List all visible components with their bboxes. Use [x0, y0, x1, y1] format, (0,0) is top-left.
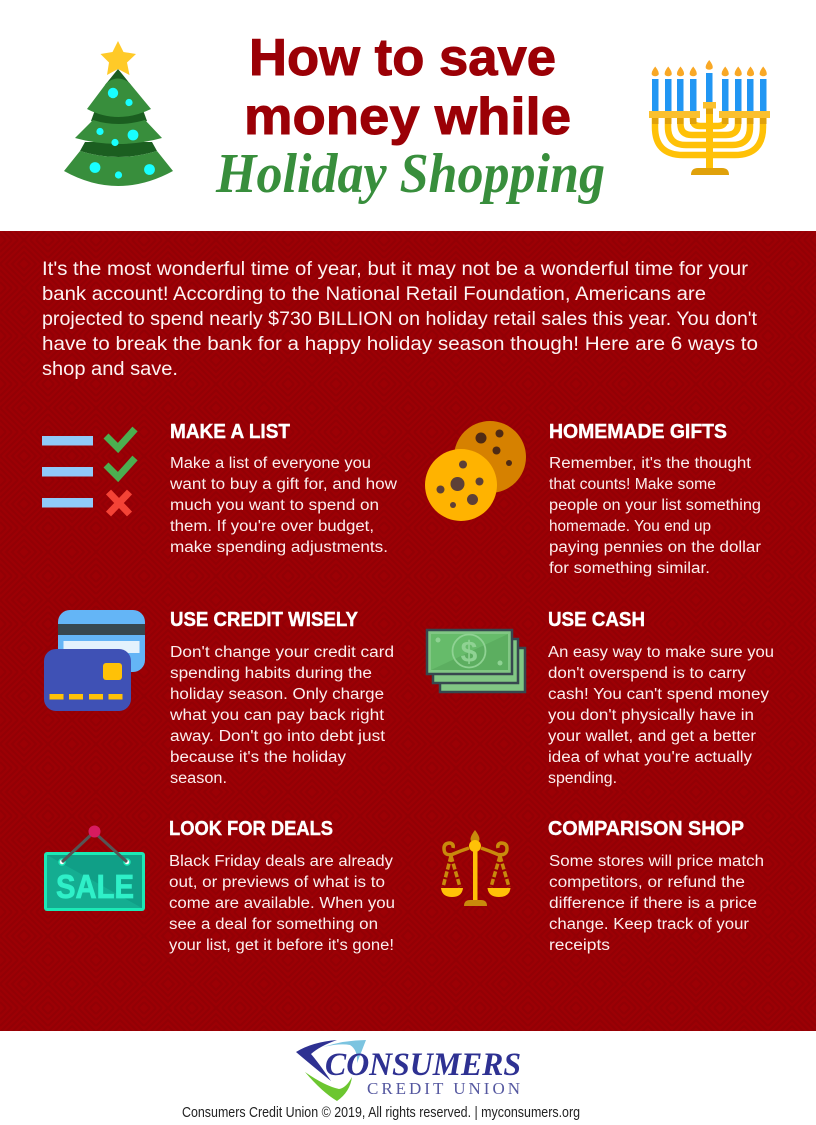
- icon: credit cards: [44, 610, 145, 711]
- section: make a list: make spending adjustments.: [170, 539, 388, 556]
- section: comparison shop: COMPARISON SHOP: [548, 817, 744, 840]
- section: make a list: want to buy a gift for, and how: [169, 476, 398, 493]
- section: use credit wisely: USE CREDIT WISELY: [170, 608, 358, 631]
- section: homemade gifts: HOMEMADE GIFTS: [549, 420, 727, 443]
- section: comparison shop: Some stores will price match: [549, 853, 764, 870]
- section: comparison shop: receipts: [549, 937, 610, 954]
- logo: Consumers Credit Union: CREDIT UNION: [367, 1079, 520, 1098]
- logo: Consumers Credit Union: [296, 1040, 521, 1101]
- title: Holiday Shopping: [215, 143, 605, 205]
- intro paragraph: have to break the bank for a happy holiday season though! Here are 6 ways to: [42, 334, 758, 355]
- section: look for deals: see a deal for something on: [169, 916, 378, 933]
- title: money while: [244, 88, 571, 146]
- section: make a list: Make a list of everyone you: [170, 455, 371, 472]
- section: look for deals: your list, get it before it's gone!: [169, 937, 394, 954]
- section: look for deals: Black Friday deals are already: [169, 853, 393, 870]
- section: use credit wisely: what you can pay back right: [169, 707, 385, 724]
- section: use credit wisely: season.: [170, 770, 227, 787]
- footer copyright: Consumers Credit Union © 2019, All rights reserved. | myconsumers.org: [182, 1105, 580, 1121]
- section: use cash: An easy way to make sure you: [548, 644, 774, 661]
- icon: checklist: [42, 429, 135, 514]
- section: look for deals: LOOK FOR DEALS: [169, 817, 333, 840]
- section: look for deals: out, or previews of what is to: [169, 874, 385, 891]
- section: use cash: USE CASH: [548, 608, 645, 631]
- section: comparison shop: difference if there is a price: [549, 895, 757, 912]
- section: comparison shop: [548, 817, 764, 954]
- section: homemade gifts: people on your list something: [549, 497, 761, 514]
- icon: sale sign: SALE: [56, 868, 134, 905]
- section: homemade gifts: homemade. You end up: [549, 518, 711, 535]
- icon: cookies: [425, 421, 526, 521]
- section: make a list: much you want to spend on: [170, 497, 379, 514]
- intro paragraph: [42, 259, 758, 380]
- icon: menorah: [649, 60, 770, 175]
- section: use cash: you don't physically have in: [548, 707, 754, 724]
- logo: Consumers Credit Union: CONSUMERS: [325, 1047, 521, 1083]
- section: comparison shop: competitors, or refund the: [549, 874, 745, 891]
- icon: balance scale: [441, 830, 510, 906]
- section: look for deals: [169, 817, 395, 954]
- section: homemade gifts: that counts! Make some: [549, 476, 716, 493]
- section: use credit wisely: Don't change your credit card: [170, 644, 394, 661]
- section: use credit wisely: spending habits during the: [170, 665, 372, 682]
- section: use cash: spending.: [548, 770, 617, 787]
- intro paragraph: shop and save.: [42, 359, 178, 380]
- intro paragraph: projected to spend nearly $730 BILLION on holiday retail sales this year. You don't: [42, 309, 758, 330]
- section: use cash: idea of what you're actually: [548, 749, 752, 766]
- section: homemade gifts: paying pennies on the dollar: [549, 539, 761, 556]
- section: use credit wisely: [169, 608, 394, 787]
- section: comparison shop: change. Keep track of your: [549, 916, 749, 933]
- icon: stack of cash: [427, 630, 525, 692]
- title: How to save: [249, 29, 556, 87]
- section: make a list: MAKE A LIST: [170, 420, 290, 443]
- section: use credit wisely: away. Don't go into debt just: [170, 728, 386, 745]
- section: use cash: your wallet, and get a better: [548, 728, 756, 745]
- icon: stack of cash: $: [461, 636, 478, 669]
- section: homemade gifts: for something similar.: [549, 560, 710, 577]
- red content band: [0, 231, 816, 1031]
- icon: sale sign: [44, 826, 145, 911]
- section: use cash: cash! You can't spend money: [548, 686, 769, 703]
- section: use credit wisely: holiday season. Only charge: [170, 686, 384, 703]
- section: homemade gifts: Remember, it's the thought: [549, 455, 752, 472]
- intro paragraph: bank account! According to the National Retail Foundation, Americans are: [42, 284, 706, 305]
- section: homemade gifts: [549, 420, 761, 577]
- section: make a list: [169, 420, 398, 556]
- intro paragraph: It's the most wonderful time of year, but it may not be a wonderful time for your: [42, 259, 749, 280]
- section: make a list: them. If you're over budget,: [170, 518, 374, 535]
- icon: christmas tree: [64, 41, 173, 186]
- section: use cash: don't overspend is to carry: [548, 665, 746, 682]
- title: [215, 29, 605, 205]
- section: use cash: [548, 608, 774, 787]
- section: look for deals: come are available. When you: [169, 895, 395, 912]
- section: use credit wisely: because it's the holiday: [170, 749, 346, 766]
